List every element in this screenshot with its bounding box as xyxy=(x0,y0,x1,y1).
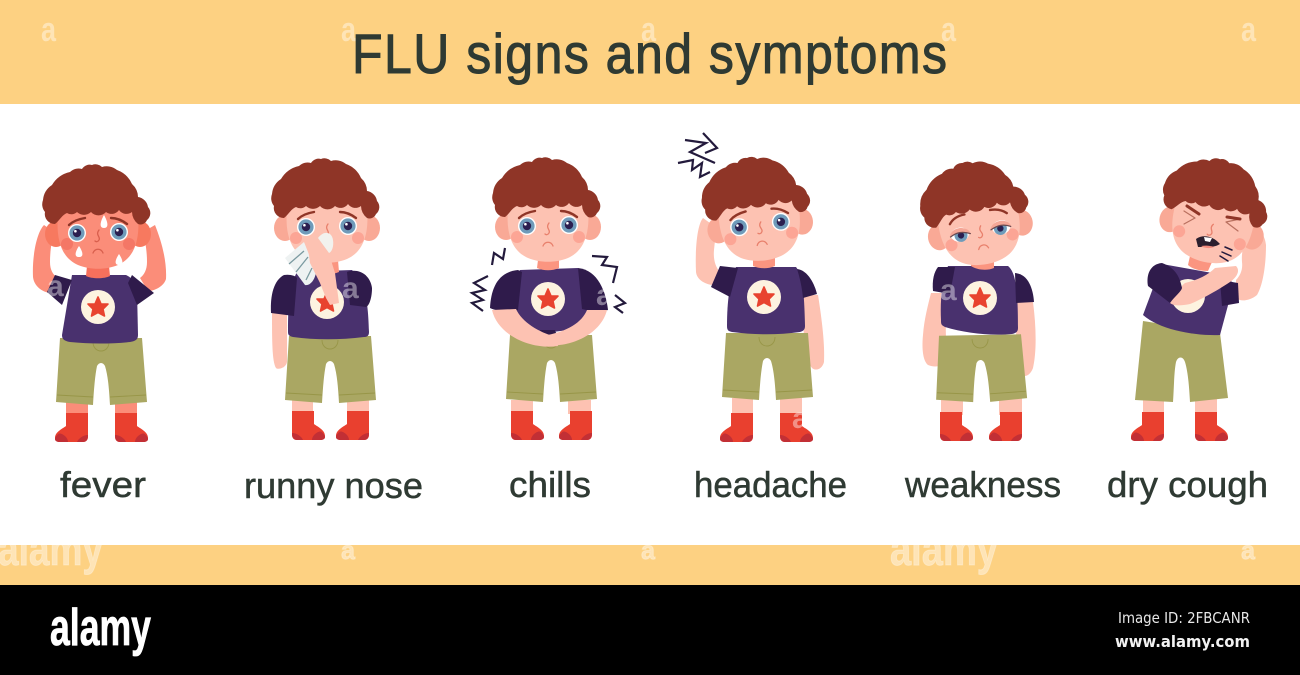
left sleeve xyxy=(1148,263,1182,303)
socks xyxy=(55,413,148,442)
legs xyxy=(732,398,802,416)
shorts xyxy=(506,335,597,402)
shirt xyxy=(47,275,154,344)
face: worried eyes xyxy=(518,211,578,235)
watermark in lower band: a xyxy=(641,535,656,565)
tissue at nose xyxy=(318,233,333,253)
raised arm xyxy=(696,218,720,285)
tired eyes xyxy=(947,207,1012,244)
neck xyxy=(86,266,110,278)
head tilted xyxy=(913,152,1039,274)
shiver marks xyxy=(472,248,625,313)
watermark letters on figures xyxy=(47,270,957,435)
raised arm xyxy=(1236,230,1266,300)
watermark letters in header: a xyxy=(1241,11,1257,49)
socks xyxy=(511,411,592,440)
watermark in lower band xyxy=(0,545,1256,575)
watermark letters on figures: a xyxy=(940,274,957,307)
coughing mouth xyxy=(1196,236,1220,248)
watermark letters on figures: a xyxy=(596,279,613,312)
legs xyxy=(941,398,1022,415)
label: runny nose: runny nose xyxy=(244,465,423,506)
watermark letters on figures: a xyxy=(47,270,64,303)
figure: runny nose xyxy=(271,158,380,440)
shorts xyxy=(935,334,1027,403)
shirt xyxy=(271,270,372,339)
arms xyxy=(923,293,1036,376)
head tilted xyxy=(1150,148,1278,273)
figure: dry cough xyxy=(1131,148,1278,441)
pain marks xyxy=(678,133,717,177)
legs xyxy=(66,402,137,416)
legs xyxy=(511,400,591,414)
cough marks xyxy=(1220,247,1232,261)
head xyxy=(492,157,601,262)
label: headache: headache xyxy=(694,464,847,505)
head xyxy=(271,158,380,263)
watermark letters on figures: a xyxy=(342,272,359,305)
watermark letters in header: a xyxy=(941,11,957,49)
title: FLU signs and symptoms xyxy=(352,23,947,86)
watermark letters in header: a xyxy=(641,11,657,49)
hand and forearm xyxy=(307,233,339,305)
neck xyxy=(1188,256,1212,271)
shorts xyxy=(285,336,376,403)
left arm xyxy=(272,312,287,369)
watermark letters in header: a xyxy=(41,11,57,49)
figure: weakness xyxy=(913,152,1039,441)
face: worried eyes xyxy=(68,218,128,242)
right arm xyxy=(801,295,824,370)
footer bar xyxy=(0,585,1300,675)
label: fever: fever xyxy=(60,464,146,505)
face: worried eyes xyxy=(297,212,357,236)
watermark letters on figures: a xyxy=(792,402,809,435)
label: dry cough: dry cough xyxy=(1107,464,1268,505)
watermark in lower band: a xyxy=(1241,535,1256,565)
crossed arms xyxy=(492,309,607,347)
watermark letters in header: a xyxy=(341,11,357,49)
watermark in lower band: alamy xyxy=(890,523,998,575)
neck xyxy=(315,260,339,274)
label: chills: chills xyxy=(509,464,591,505)
image id: Image ID: 2FBCANR xyxy=(1118,609,1250,627)
shirt xyxy=(933,266,1034,335)
figure: headache xyxy=(678,133,824,442)
legs xyxy=(292,400,369,415)
label: weakness: weakness xyxy=(904,464,1061,505)
forearm across chest xyxy=(1170,266,1238,305)
head xyxy=(42,164,151,269)
header band xyxy=(0,0,1300,104)
mouth xyxy=(543,242,553,246)
watermark in lower band: alamy xyxy=(0,523,103,575)
figure: fever xyxy=(33,164,166,442)
shorts xyxy=(722,333,813,400)
figure: chills xyxy=(472,157,625,440)
shirt xyxy=(711,266,817,334)
socks xyxy=(292,411,369,440)
watermark in lower band: a xyxy=(341,535,356,565)
neck xyxy=(971,258,994,270)
neck xyxy=(537,260,559,270)
head tilted xyxy=(697,151,817,266)
shirt xyxy=(490,268,608,335)
neck xyxy=(753,256,775,268)
sweat drops xyxy=(76,215,122,265)
mouth xyxy=(93,249,103,253)
shirt xyxy=(1143,264,1239,335)
tissue xyxy=(285,242,316,285)
legs xyxy=(1143,398,1217,415)
watermark letters in header xyxy=(41,11,1257,49)
website: www.alamy.com xyxy=(1115,632,1250,651)
shorts xyxy=(56,338,147,405)
socks xyxy=(1131,412,1228,441)
raised arms xyxy=(33,225,166,293)
closed eyes and brows xyxy=(1184,206,1240,231)
shorts xyxy=(1135,321,1228,402)
socks xyxy=(720,413,813,442)
logo: alamy xyxy=(50,599,151,657)
socks xyxy=(940,412,1022,441)
lower band xyxy=(0,545,1300,585)
